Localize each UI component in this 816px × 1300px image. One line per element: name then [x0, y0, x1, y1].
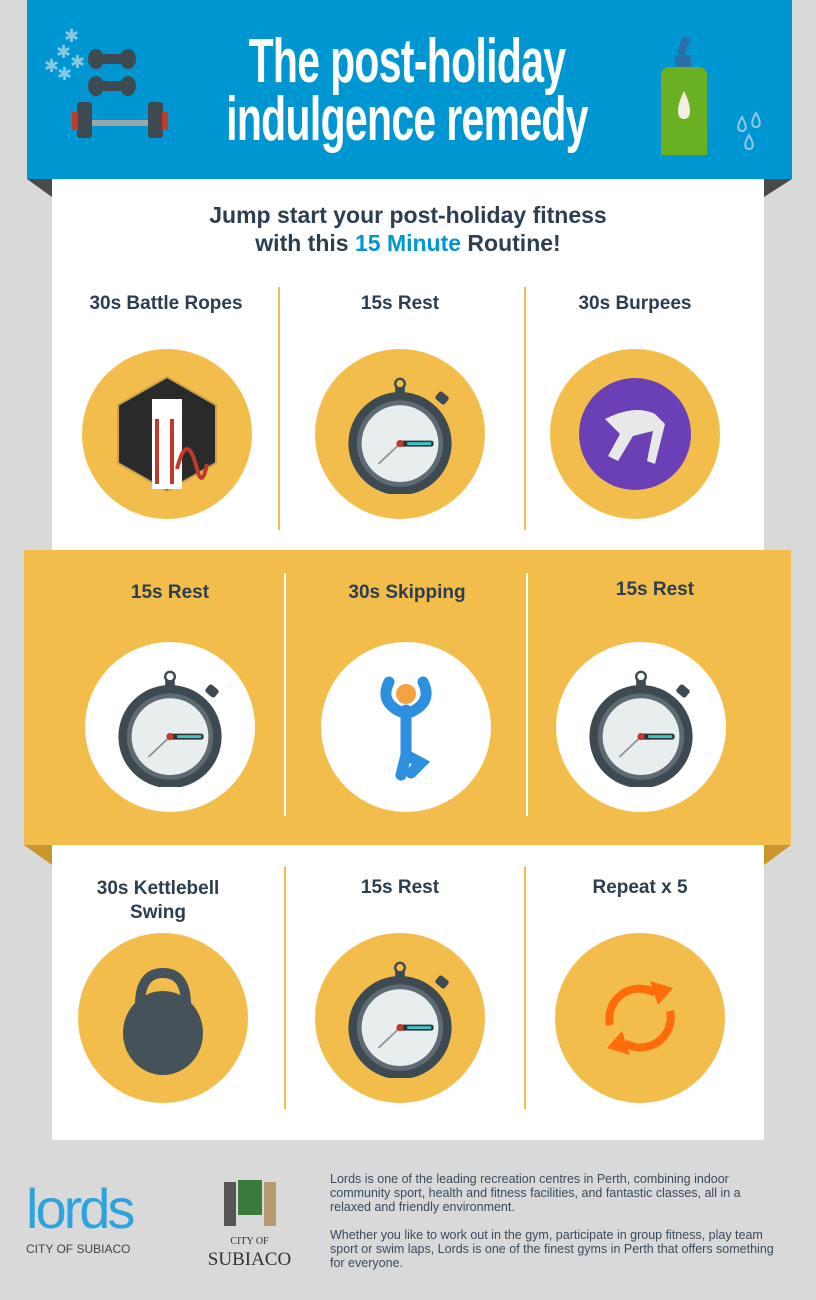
- header banner: [27, 0, 792, 179]
- icon: dumbbells: ✱: [44, 56, 59, 76]
- footer text: Lords is one of the leading recreation centres in Perth, combining indoor community sport, health and fitness facilities, and fantastic classes, all in a relaxed and friendly environment.: [330, 1172, 741, 1214]
- fold left top: [27, 179, 52, 197]
- circle: burpees: [550, 349, 720, 519]
- row1 labels: 30s Battle Ropes: [89, 293, 243, 314]
- subtitle: [209, 202, 607, 256]
- stopwatch 1: [315, 349, 485, 519]
- circle: skipping: [321, 642, 491, 812]
- circle: battle ropes: [82, 349, 252, 519]
- icon: water bottle: [661, 36, 761, 155]
- panel: yellow band: [24, 550, 791, 845]
- logo: city of subiaco: SUBIACO: [208, 1249, 291, 1270]
- icon: dumbbells: ✱: [64, 26, 79, 46]
- icon: dumbbells: ✱: [56, 42, 71, 62]
- stopwatch 3: [556, 642, 726, 812]
- logo: city of subiaco: CITY OF: [230, 1236, 269, 1247]
- logo: lords: lords: [26, 1177, 132, 1240]
- logo: lords: CITY OF SUBIACO: [26, 1242, 130, 1256]
- panel: white bottom: [52, 845, 764, 1140]
- text: 15s Rest: [361, 293, 439, 314]
- title: The post-holiday: [249, 27, 565, 96]
- text: 15s Rest: [361, 877, 439, 898]
- text: 15s Rest: [131, 582, 209, 603]
- icon: dumbbells: ✱: [70, 52, 85, 72]
- text: Repeat x 5: [592, 877, 688, 898]
- text: Swing: [130, 902, 186, 923]
- logo: city of subiaco: [208, 1180, 291, 1270]
- subtitle: with this 15 Minute Routine!: [255, 230, 561, 256]
- footer text: Whether you like to work out in the gym, participate in group fitness, play team sport or swim laps, Lords is one of the finest gyms in Perth that offers something for everyone.: [330, 1228, 774, 1270]
- footer text: [330, 1172, 774, 1270]
- title: indulgence remedy: [226, 85, 588, 154]
- circle: kettlebell: [78, 933, 248, 1103]
- text: 30s Skipping: [348, 582, 466, 603]
- icon: dumbbells: [44, 26, 168, 138]
- title: [226, 27, 588, 154]
- stopwatch 4: [315, 933, 485, 1103]
- stopwatch 2: [85, 642, 255, 812]
- icon: dumbbells: ✱: [57, 64, 72, 84]
- text: 30s Burpees: [578, 293, 692, 314]
- text: 30s Kettlebell: [97, 878, 219, 899]
- text: 15s Rest: [616, 579, 694, 600]
- subtitle: Jump start your post-holiday fitness: [209, 202, 607, 228]
- panel: white top: [52, 179, 764, 550]
- circle: repeat: [555, 933, 725, 1103]
